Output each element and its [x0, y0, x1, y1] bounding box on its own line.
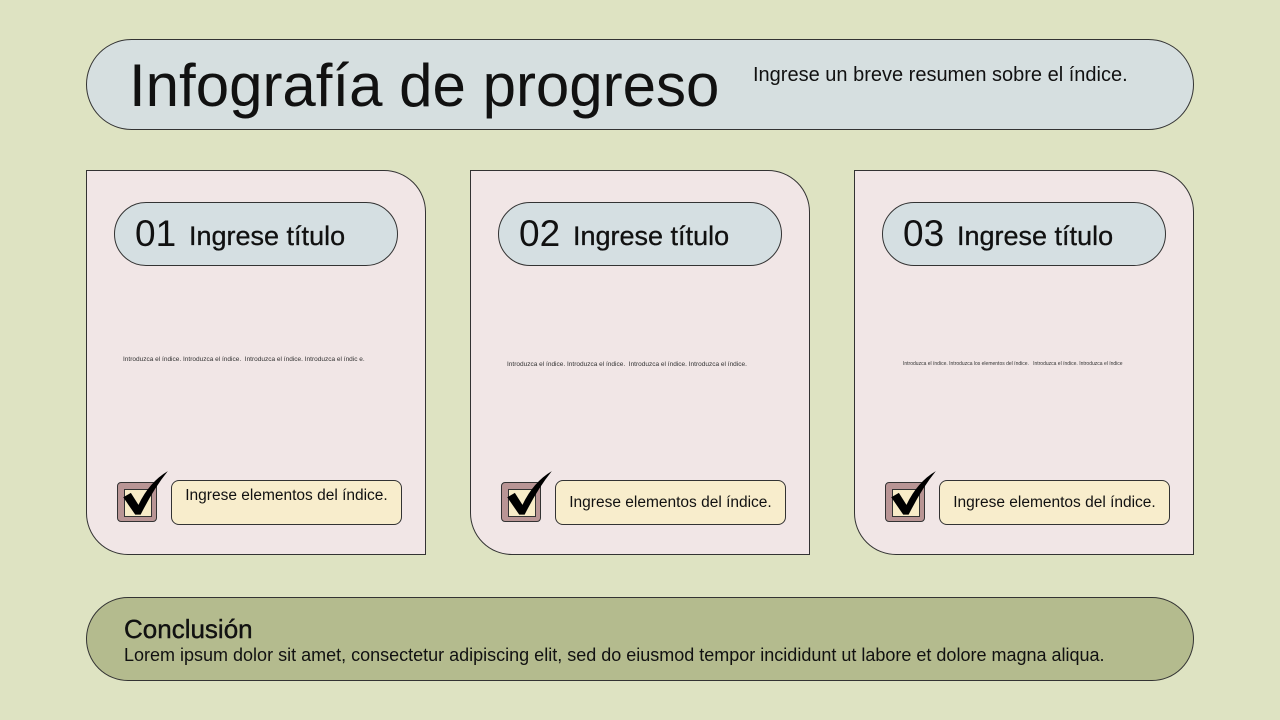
item box 01: Ingrese elementos del índice.	[185, 487, 388, 504]
item box 02	[555, 480, 786, 525]
title pill 02: 02	[519, 213, 560, 254]
title: Infografía de progreso	[129, 52, 719, 119]
item box 03: Ingrese elementos del índice.	[953, 494, 1156, 511]
body text 02: Introduzca el índice. Introduzca el índice. Introduzca el índice. Introduzca el índice.	[507, 361, 747, 368]
title pill 03	[882, 202, 1166, 266]
icon: checkbox 03	[885, 482, 925, 522]
body text 01: Introduzca el índice. Introduzca el índice. Introduzca el índice. Introduzca el índic e.	[123, 356, 365, 363]
title pill 02: Ingrese título	[573, 221, 729, 251]
body text 03: Introduzca el índice. Introduzca los elementos del índice. Introduzca el índice. Introduzca el índice	[903, 361, 1123, 367]
title pill 03: Ingrese título	[957, 221, 1113, 251]
panel: 03	[854, 170, 1194, 555]
title pill 02	[498, 202, 782, 266]
panel: 02	[470, 170, 810, 555]
header banner	[86, 39, 1194, 130]
conclusion text: Lorem ipsum dolor sit amet, consectetur adipiscing elit, sed do eiusmod tempor incididunt ut labore et dolore magna aliqua.	[124, 645, 1105, 665]
summary text: Ingrese un breve resumen sobre el índice.	[753, 64, 1128, 86]
item box 02: Ingrese elementos del índice.	[569, 494, 772, 511]
conclusion banner	[86, 597, 1194, 681]
title pill 01: 01	[135, 213, 176, 254]
item box 01	[171, 480, 402, 525]
title pill 03: 03	[903, 213, 944, 254]
conclusion heading: Conclusión	[124, 614, 253, 644]
icon: checkbox 02	[501, 482, 541, 522]
panel: 01	[86, 170, 426, 555]
item box 03	[939, 480, 1170, 525]
icon: checkbox 01	[117, 482, 157, 522]
title pill 01	[114, 202, 398, 266]
title pill 01: Ingrese título	[189, 221, 345, 251]
